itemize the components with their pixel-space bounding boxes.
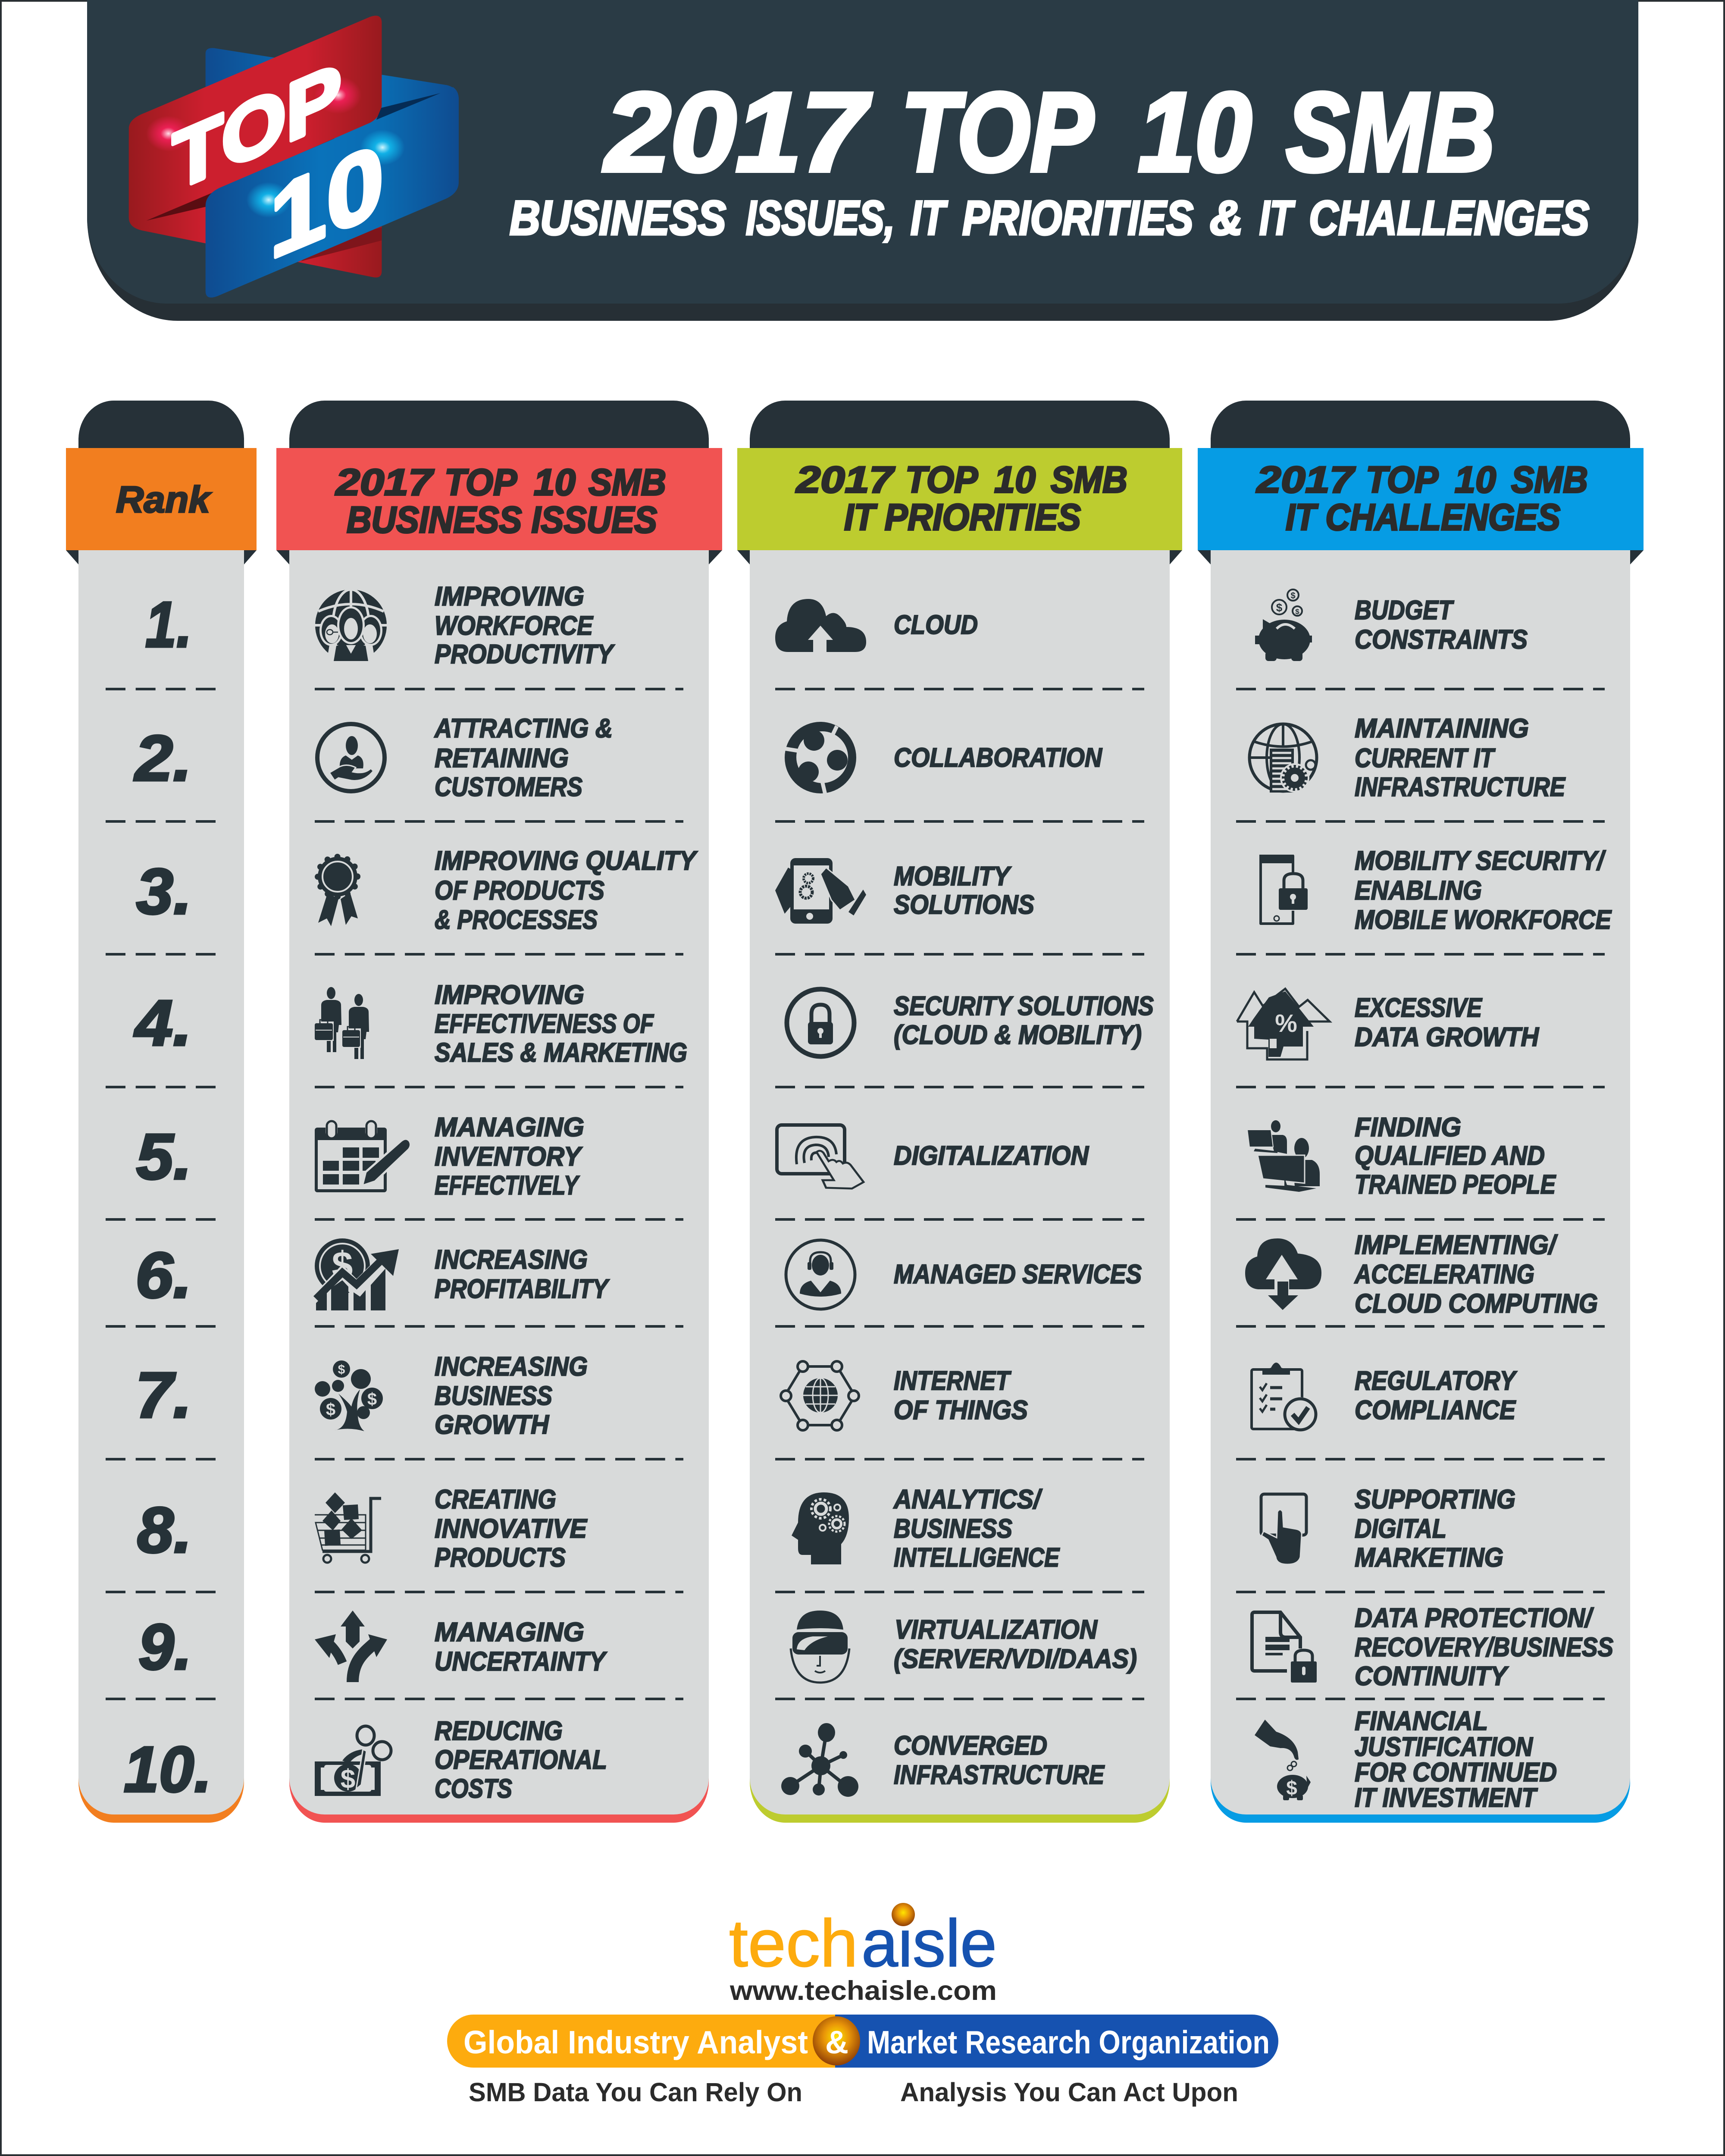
- panel: rank column: [66, 401, 257, 1823]
- text: regulatory compliance: [1355, 1366, 1518, 1425]
- main title: 2017: [604, 70, 873, 195]
- text: internet of things: INTERNET: [894, 1366, 1011, 1396]
- text: financial justification: IT INVESTMENT: [1355, 1783, 1538, 1813]
- text: budget constraints: BUDGET: [1355, 595, 1454, 625]
- heading: business issues: SMB: [589, 462, 666, 503]
- text: improving quality: & PROCESSES: [435, 905, 598, 935]
- text: maintaining current it infrastructure: MAINTAINING: [1355, 714, 1529, 743]
- techaisle logo: [729, 1903, 997, 1981]
- heading: it priorities: 2017: [795, 459, 895, 501]
- rank numbers: 4.: [134, 987, 192, 1059]
- icon: coin and growth chart: [315, 1238, 399, 1310]
- icon: globe with server: [1249, 724, 1317, 793]
- icon: two business people: [314, 987, 369, 1059]
- text: financial justification: [1355, 1706, 1557, 1813]
- icon: document with lock: [1252, 1612, 1317, 1683]
- icon: award ribbon: [318, 857, 358, 926]
- main title: [604, 70, 1495, 195]
- text: excessive data growth: [1355, 993, 1539, 1052]
- text: supporting digital marketing: SUPPORTING: [1355, 1485, 1515, 1514]
- text: security solutions: (CLOUD & MOBILITY): [894, 1020, 1142, 1050]
- text: implementing cloud computing: IMPLEMENTING/: [1355, 1230, 1558, 1260]
- icon: hand holding customer: [317, 724, 385, 791]
- subtitle: IT: [911, 191, 948, 245]
- text: reducing operational costs: COSTS: [435, 1774, 512, 1804]
- website url: www.techaisle.com: [729, 1976, 997, 2006]
- icon: money and scissors: $: [341, 1764, 355, 1794]
- panel: it challenges: [1198, 401, 1644, 1823]
- text: mobility security: MOBILITY SECURITY/: [1355, 846, 1606, 876]
- icon: globe with people: [315, 589, 387, 661]
- text: analytics: INTELLIGENCE: [894, 1543, 1060, 1573]
- text: increasing profitability: [435, 1245, 610, 1304]
- text: increasing profitability: PROFITABILITY: [435, 1274, 610, 1304]
- text: analytics: ANALYTICS/: [893, 1485, 1043, 1514]
- icon: shopping cart with boxes: [315, 1492, 381, 1563]
- text: improving workforce productivity: PRODUCTIVITY: [435, 639, 615, 669]
- tagline pill: &: [825, 2024, 848, 2060]
- text: budget constraints: [1355, 595, 1528, 655]
- text: digitalization: DIGITALIZATION: [894, 1141, 1089, 1171]
- icon: piggy bank and coins: $: [1276, 601, 1283, 614]
- icon: converged network: [781, 1723, 858, 1797]
- icon: piggy bank and coins: [1255, 589, 1312, 661]
- text: maintaining current it infrastructure: INFRASTRUCTURE: [1355, 772, 1565, 802]
- icon: cloud up and down: [1245, 1238, 1321, 1310]
- text: analytics: BUSINESS: [894, 1514, 1012, 1544]
- rank numbers: 5.: [136, 1120, 192, 1193]
- text: implementing cloud computing: ACCELERATING: [1354, 1260, 1534, 1289]
- text: data protection: [1355, 1603, 1613, 1691]
- heading: business issues: TOP: [445, 462, 517, 503]
- icon: hand on tablet: [1261, 1494, 1306, 1564]
- tagline pill: Global Industry Analyst: [463, 2024, 808, 2060]
- heading: business issues: [335, 462, 666, 541]
- heading: it challenges: 2017: [1256, 459, 1356, 501]
- icon: hand dropping coin into piggy bank: [1255, 1720, 1311, 1800]
- text: implementing cloud computing: CLOUD COMPUTING: [1355, 1289, 1598, 1319]
- text: attracting and retaining customers: [434, 714, 613, 802]
- rank numbers: 8.: [137, 1494, 192, 1566]
- text: reducing operational costs: REDUCING: [435, 1716, 563, 1746]
- slogan right: Analysis You Can Act Upon: [900, 2078, 1238, 2107]
- heading: it challenges: 10: [1455, 459, 1496, 501]
- text: maintaining current it infrastructure: CURRENT IT: [1355, 743, 1496, 773]
- heading: it priorities: SMB: [1051, 459, 1127, 501]
- text: improving effectiveness: EFFECTIVENESS OF: [435, 1009, 654, 1039]
- heading: business issues: 10: [534, 462, 576, 503]
- text: managing uncertainty: [435, 1617, 607, 1677]
- icon: padlock in circle: [787, 989, 854, 1056]
- text: reducing operational costs: [435, 1716, 607, 1804]
- icon: piggy bank and coins: $: [1290, 591, 1296, 601]
- subtitle: [510, 191, 1589, 245]
- text: increasing profitability: INCREASING: [435, 1245, 588, 1275]
- rank numbers: 10.: [124, 1733, 212, 1805]
- text: improving effectiveness: [435, 980, 687, 1068]
- text: supporting digital marketing: MARKETING: [1355, 1543, 1503, 1573]
- text: improving effectiveness: SALES & MARKETING: [435, 1038, 687, 1068]
- text: managed services: MANAGED SERVICES: [894, 1260, 1142, 1289]
- heading: business issues: 2017: [335, 462, 435, 503]
- icon: money tree: $: [338, 1363, 345, 1377]
- rank numbers: 6.: [135, 1239, 192, 1311]
- techaisle logo: tech: [729, 1906, 858, 1981]
- subtitle: ISSUES,: [746, 191, 895, 245]
- header banner: [87, 0, 1638, 321]
- heading: it priorities: 10: [994, 459, 1036, 501]
- text: security solutions: [894, 991, 1154, 1050]
- icon: support agent: [786, 1240, 855, 1309]
- text: improving quality: OF PRODUCTS: [435, 876, 604, 906]
- icon: phone and padlock: [1259, 855, 1308, 924]
- text: virtualization: VIRTUALIZATION: [895, 1615, 1098, 1645]
- icon: house growth arrow: [1237, 989, 1330, 1059]
- heading: rank: Rank: [116, 479, 212, 520]
- slogan left: SMB Data You Can Rely On: [469, 2078, 802, 2107]
- text: supporting digital marketing: DIGITAL: [1355, 1514, 1446, 1544]
- text: improving workforce productivity: WORKFORCE: [435, 611, 593, 641]
- text: managing uncertainty: UNCERTAINTY: [435, 1647, 607, 1677]
- text: improving effectiveness: IMPROVING: [435, 980, 584, 1010]
- heading: it priorities: TOP: [905, 459, 978, 501]
- techaisle logo: aisle: [861, 1906, 997, 1981]
- text: converged infrastructure: [894, 1731, 1105, 1790]
- icon: money tree: $: [326, 1400, 335, 1419]
- text: converged infrastructure: INFRASTRUCTURE: [894, 1760, 1105, 1790]
- main title: 10: [1138, 70, 1252, 195]
- text: increasing business growth: [435, 1352, 588, 1440]
- text: supporting digital marketing: [1355, 1485, 1515, 1573]
- subtitle: CHALLENGES: [1309, 191, 1589, 245]
- text: excessive data growth: DATA GROWTH: [1355, 1022, 1539, 1052]
- text: improving workforce productivity: IMPROVING: [435, 582, 584, 611]
- text: data protection: RECOVERY/BUSINESS: [1355, 1633, 1613, 1662]
- text: internet of things: OF THINGS: [894, 1395, 1028, 1425]
- icon: house growth arrow: %: [1275, 1009, 1297, 1037]
- heading: it priorities: [795, 459, 1127, 538]
- text: improving workforce productivity: [435, 582, 615, 669]
- tagline pill: Market Research Organization: [867, 2024, 1270, 2060]
- icon: head with gears: [792, 1492, 849, 1564]
- icon: money and scissors: [315, 1726, 391, 1796]
- text: security solutions: SECURITY SOLUTIONS: [894, 991, 1154, 1021]
- rank numbers: 9.: [138, 1611, 192, 1683]
- text: attracting and retaining customers: RETAINING: [435, 743, 569, 773]
- heading: it challenges: IT CHALLENGES: [1286, 497, 1560, 538]
- icon: virtual reality headset: [791, 1611, 849, 1683]
- text: cloud: CLOUD: [894, 610, 978, 640]
- text: excessive data growth: EXCESSIVE: [1355, 993, 1482, 1023]
- text: managing inventory: MANAGING: [435, 1112, 584, 1142]
- rank numbers: 3.: [136, 855, 192, 928]
- text: finding qualified and trained people: QUALIFIED AND: [1355, 1141, 1545, 1171]
- text: virtualization: [894, 1615, 1137, 1674]
- main title: TOP: [901, 70, 1094, 195]
- panel: it priorities: [737, 401, 1182, 1823]
- subtitle: BUSINESS: [510, 191, 726, 245]
- text: increasing business growth: INCREASING: [435, 1352, 588, 1382]
- text: regulatory compliance: COMPLIANCE: [1355, 1395, 1516, 1425]
- text: managing uncertainty: MANAGING: [435, 1617, 584, 1647]
- heading: it challenges: [1256, 459, 1588, 538]
- text: maintaining current it infrastructure: [1355, 714, 1565, 802]
- text: financial justification: JUSTIFICATION: [1355, 1732, 1533, 1762]
- text: creating innovative products: PRODUCTS: [435, 1543, 566, 1573]
- text: attracting and retaining customers: ATTRACTING &: [434, 714, 613, 743]
- panel: business issues: [276, 401, 722, 1823]
- icon: tablet touch: [777, 1125, 864, 1188]
- text: managing inventory: INVENTORY: [435, 1142, 583, 1172]
- text: implementing cloud computing: [1354, 1230, 1598, 1319]
- rank numbers: 1.: [145, 588, 192, 661]
- text: converged infrastructure: CONVERGED: [894, 1731, 1047, 1761]
- text: creating innovative products: INNOVATIVE: [435, 1514, 588, 1544]
- text: creating innovative products: [435, 1485, 588, 1573]
- text: managing inventory: [435, 1112, 584, 1200]
- text: financial justification: FOR CONTINUED: [1355, 1758, 1557, 1787]
- heading: it challenges: SMB: [1511, 459, 1588, 501]
- icon: money tree: [315, 1360, 383, 1431]
- text: managing inventory: EFFECTIVELY: [435, 1171, 580, 1200]
- text: regulatory compliance: REGULATORY: [1355, 1366, 1518, 1396]
- icon: piggy bank and coins: $: [1295, 608, 1299, 616]
- top 10 ribbon logo: 10: [269, 122, 384, 281]
- icon: diverging arrows: [315, 1611, 387, 1682]
- icon: cloud upload: [775, 599, 866, 652]
- subtitle: PRIORITIES: [962, 191, 1193, 245]
- subtitle: &: [1210, 191, 1243, 245]
- text: improving quality: [435, 846, 698, 935]
- subtitle: IT: [1259, 191, 1296, 245]
- rank numbers: [124, 588, 212, 1805]
- text: finding qualified and trained people: FINDING: [1355, 1112, 1461, 1142]
- text: budget constraints: CONSTRAINTS: [1355, 625, 1528, 655]
- icon: internet of things: [781, 1361, 859, 1430]
- text: creating innovative products: CREATING: [435, 1485, 556, 1514]
- icon: collaboration wheel: [784, 722, 856, 794]
- text: mobility solutions: [894, 862, 1034, 920]
- icon: hands with smartphone: [775, 858, 866, 924]
- text: improving quality: IMPROVING QUALITY: [435, 846, 698, 876]
- tagline pill: [447, 2015, 1278, 2068]
- heading: it challenges: TOP: [1366, 459, 1439, 501]
- icon: coin and growth chart: $: [332, 1244, 353, 1286]
- top 10 ribbon logo: [129, 16, 459, 298]
- text: mobility solutions: SOLUTIONS: [894, 890, 1034, 920]
- text: virtualization: (SERVER/VDI/DAAS): [894, 1644, 1137, 1674]
- text: increasing business growth: BUSINESS: [435, 1381, 552, 1411]
- icon: money tree: $: [367, 1390, 377, 1409]
- icon: hand dropping coin into piggy bank: $: [1286, 1777, 1297, 1799]
- text: financial justification: FINANCIAL: [1355, 1706, 1488, 1736]
- icon: people at computers: [1247, 1120, 1320, 1192]
- text: data protection: DATA PROTECTION/: [1355, 1603, 1594, 1633]
- icon: clipboard checklist: [1252, 1363, 1316, 1430]
- text: finding qualified and trained people: TRAINED PEOPLE: [1355, 1170, 1556, 1200]
- text: mobility security: [1355, 846, 1612, 935]
- icon: calendar and pencil: [315, 1120, 411, 1192]
- text: increasing business growth: GROWTH: [435, 1410, 549, 1440]
- main title: SMB: [1286, 70, 1495, 195]
- text: mobility security: ENABLING: [1355, 876, 1482, 906]
- text: finding qualified and trained people: [1355, 1112, 1556, 1200]
- top 10 ribbon logo: TOP: [172, 45, 341, 209]
- text: mobility solutions: MOBILITY: [894, 862, 1012, 891]
- text: internet of things: [894, 1366, 1028, 1425]
- text: analytics: [893, 1485, 1060, 1573]
- heading: business issues: BUSINESS ISSUES: [347, 499, 657, 541]
- text: reducing operational costs: OPERATIONAL: [435, 1745, 607, 1775]
- text: attracting and retaining customers: CUSTOMERS: [435, 772, 582, 802]
- text: collaboration: COLLABORATION: [894, 743, 1102, 773]
- text: data protection: CONTINUITY: [1355, 1661, 1509, 1691]
- footer: techaisle branding: [447, 1903, 1278, 2107]
- rank numbers: 2.: [134, 722, 192, 794]
- heading: it priorities: IT PRIORITIES: [844, 497, 1081, 538]
- text: mobility security: MOBILE WORKFORCE: [1355, 905, 1612, 935]
- rank numbers: 7.: [135, 1359, 192, 1431]
